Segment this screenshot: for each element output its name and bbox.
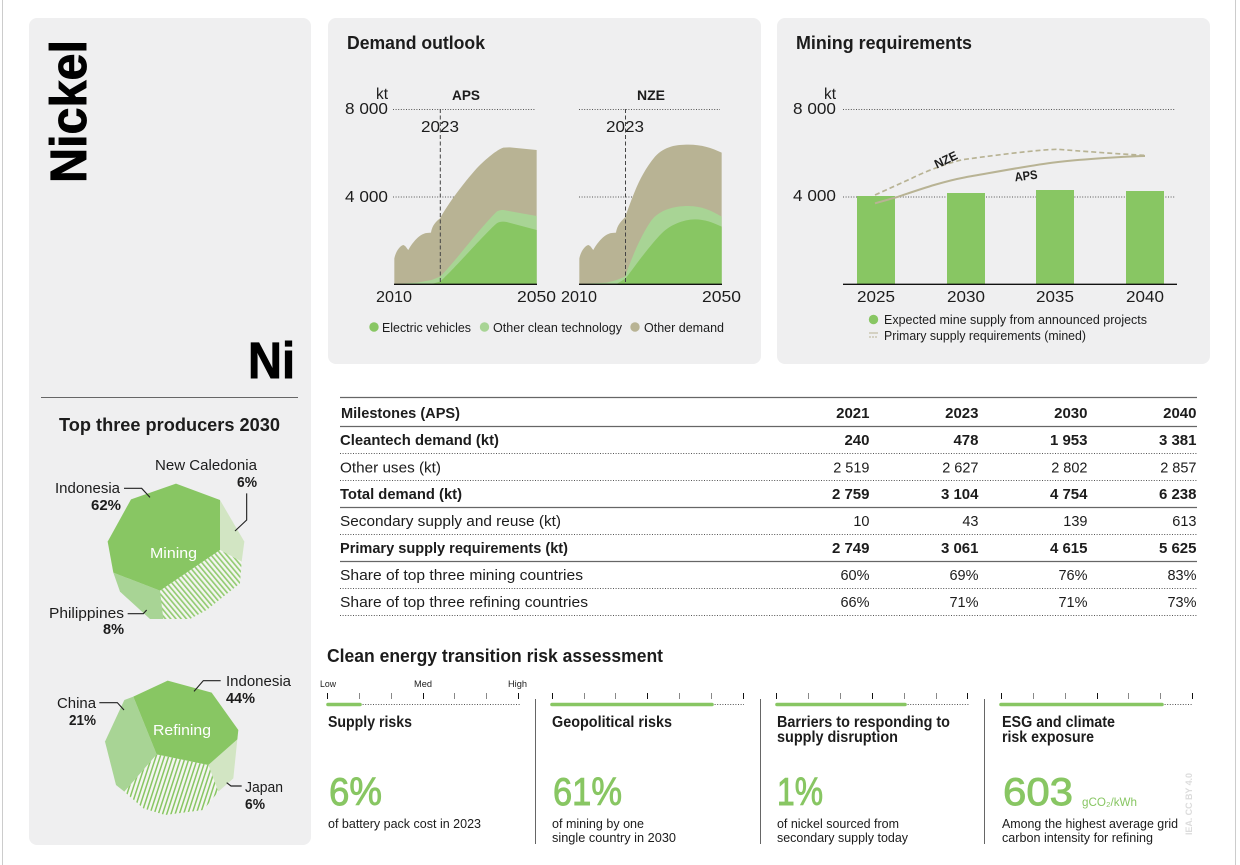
table row: mining share: 83%	[1167, 568, 1197, 584]
chart: NZE demand area: 2010	[561, 289, 597, 306]
table row: header: 2023	[945, 405, 978, 422]
table row: primary supply	[340, 540, 1196, 557]
chart: refining share polygon: 44%	[226, 690, 255, 707]
chart: mine supply bars and requirement lines: NZE	[932, 149, 960, 171]
panel: geopolitical risks: 61%	[553, 771, 622, 814]
panel: nickel overview and top producers	[29, 18, 311, 845]
table row: other uses: 2 519	[833, 460, 870, 476]
panel: barriers to responding to supply disruption: of nickel sourced from	[777, 817, 899, 831]
panel: barriers to responding to supply disruption: secondary supply today	[777, 831, 909, 845]
legend: demand categories	[369, 321, 724, 335]
panel: mining requirements	[777, 18, 1210, 364]
chart: NZE demand area	[561, 87, 741, 306]
chart: mining share polygon: Indonesia	[55, 480, 121, 497]
chart: APS demand area: 2050	[517, 289, 556, 306]
panel: ESG and climate risk exposure: Among the highest average grid	[1002, 817, 1178, 831]
panel: supply risks: 6%	[329, 771, 382, 814]
panel: ESG and climate risk exposure: 603	[1003, 771, 1073, 814]
chart: refining share polygon: Refining	[153, 722, 211, 739]
table row: mining share	[340, 568, 1197, 584]
panel: supply risks	[320, 679, 527, 831]
chart: mine supply bars and requirement lines: 4 000	[793, 188, 836, 205]
panel: demand outlook	[328, 18, 761, 364]
table row: mining share: 69%	[949, 568, 979, 584]
table row: header: Milestones (APS)	[341, 405, 460, 422]
table row: secondary supply	[340, 514, 1196, 530]
legend: mining requirements: Expected mine supply from announced projects	[884, 313, 1147, 327]
chart: mine supply bars and requirement lines: 2030	[947, 289, 985, 306]
heading: risk assessment: Clean energy transition risk assessment	[327, 646, 663, 666]
table row: primary supply: 3 061	[941, 540, 978, 557]
table row: other uses	[340, 460, 1196, 476]
legend: demand categories: Electric vehicles	[382, 321, 471, 335]
panel: geopolitical risks	[552, 693, 744, 845]
table row: cleantech demand: 240	[844, 432, 870, 449]
chart: refining share polygon: 6%	[245, 796, 265, 813]
table row: cleantech demand: 3 381	[1159, 432, 1196, 449]
table row: total demand: 4 754	[1050, 486, 1088, 503]
legend: demand categories: Other demand	[644, 321, 724, 335]
chart: APS demand area: 4 000	[345, 189, 388, 206]
panel: barriers to responding to supply disruption	[776, 693, 969, 845]
chart: NZE demand area: NZE	[637, 87, 665, 103]
chart: NZE demand area: 2050	[702, 289, 741, 306]
chart: mine supply bars and requirement lines: 2035	[1036, 289, 1074, 306]
panel: ESG and climate risk exposure: ESG and climate	[1002, 714, 1115, 731]
panel: supply risks: of battery pack cost in 2023	[328, 817, 481, 831]
table row: primary supply: Primary supply requirements (kt)	[340, 540, 568, 557]
table row: total demand: 6 238	[1159, 486, 1196, 503]
table row: primary supply: 2 749	[832, 540, 870, 557]
table row: secondary supply: 43	[962, 514, 978, 530]
table row: header: 2030	[1054, 405, 1088, 422]
panel: supply risks: Supply risks	[328, 714, 412, 731]
table row: secondary supply: 139	[1063, 514, 1088, 530]
panel: supply risks: Low	[320, 679, 336, 689]
chart: refining share polygon: China	[57, 695, 97, 712]
chart: refining share polygon: 21%	[69, 712, 96, 729]
table row: cleantech demand	[340, 432, 1196, 449]
panel: geopolitical risks: single country in 2030	[552, 831, 676, 845]
chart: APS demand area: 2010	[376, 289, 412, 306]
chart: mine supply bars and requirement lines: 2025	[857, 289, 895, 306]
chart: mining share polygon: New Caledonia	[155, 457, 258, 474]
table row: cleantech demand: 1 953	[1050, 432, 1088, 449]
table row: mining share: 60%	[840, 568, 870, 584]
panel: ESG and climate risk exposure: risk exposure	[1002, 729, 1094, 746]
table row: mining share: Share of top three mining countries	[340, 568, 583, 584]
panel: barriers to responding to supply disruption: Barriers to responding to	[777, 714, 950, 731]
table row: refining share: 66%	[840, 595, 870, 611]
table row: total demand: 3 104	[941, 486, 979, 503]
table row: total demand: 2 759	[832, 486, 870, 503]
table row: other uses: 2 627	[942, 460, 978, 476]
table row: primary supply: 4 615	[1050, 540, 1088, 557]
panel: geopolitical risks: of mining by one	[552, 817, 644, 831]
legend: mining requirements	[869, 313, 1147, 343]
table row: refining share: Share of top three refining countries	[340, 595, 588, 611]
panel: geopolitical risks: Geopolitical risks	[552, 714, 672, 731]
chart: APS demand area: 8 000	[345, 101, 388, 118]
table row: primary supply: 5 625	[1159, 540, 1196, 557]
table row: secondary supply: Secondary supply and reuse (kt)	[340, 514, 561, 530]
table: milestones APS	[340, 398, 1197, 616]
chart: APS demand area: kt	[376, 86, 389, 103]
chart: mine supply bars and requirement lines: kt	[824, 86, 837, 103]
table row: header	[341, 405, 1196, 422]
table row: header: 2021	[836, 405, 870, 422]
chart: refining share polygon	[57, 673, 292, 815]
chart: mining share polygon: Philippines	[49, 605, 124, 622]
chart: APS demand area: 2023	[421, 119, 459, 136]
table row: total demand	[340, 486, 1196, 503]
chart: mining share polygon: 62%	[91, 497, 121, 514]
table row: refining share	[340, 595, 1197, 611]
table row: refining share: 71%	[1058, 595, 1088, 611]
table row: cleantech demand: 478	[953, 432, 978, 449]
heading: demand outlook: Demand outlook	[347, 33, 486, 53]
heading: mining requirements: Mining requirements	[796, 33, 972, 53]
chemical symbol: Ni: Ni	[248, 332, 295, 389]
heading: top three producers 2030: Top three producers 2030	[59, 415, 280, 435]
table row: refining share: 73%	[1167, 595, 1197, 611]
chart: refining share polygon: Japan	[245, 779, 283, 796]
chart: mining share polygon: 8%	[103, 621, 124, 638]
chart: mining share polygon: 6%	[237, 474, 257, 491]
panel: supply risks: High	[508, 679, 527, 689]
panel: ESG and climate risk exposure	[1001, 693, 1193, 845]
chart: mine supply bars and requirement lines: APS	[1014, 168, 1038, 184]
table row: other uses: Other uses (kt)	[340, 460, 441, 476]
chart: NZE demand area: 2023	[606, 119, 644, 136]
table row: secondary supply: 613	[1172, 514, 1196, 530]
table row: secondary supply: 10	[853, 514, 870, 530]
chart: mining share polygon	[49, 457, 258, 638]
chart: mine supply bars and requirement lines: 8 000	[793, 101, 836, 118]
chart: refining share polygon: Indonesia	[226, 673, 292, 690]
panel: ESG and climate risk exposure: carbon intensity for refining	[1002, 831, 1153, 845]
table row: other uses: 2 857	[1160, 460, 1196, 476]
panel: ESG and climate risk exposure: gCO₂/kWh	[1082, 795, 1137, 809]
legend: mining requirements: Primary supply requirements (mined)	[884, 329, 1086, 343]
chart: mine supply bars and requirement lines: 2040	[1126, 289, 1164, 306]
credit: IEA CC BY 4.0: IEA. CC BY 4.0	[1184, 773, 1194, 835]
panel: barriers to responding to supply disruption: supply disruption	[777, 729, 898, 746]
legend: demand categories: Other clean technology	[493, 321, 623, 335]
table row: other uses: 2 802	[1051, 460, 1088, 476]
table row: total demand: Total demand (kt)	[340, 486, 462, 503]
table row: header: 2040	[1163, 405, 1196, 422]
chart: mine supply bars and requirement lines	[793, 86, 1177, 306]
panel: supply risks: Med	[414, 679, 432, 689]
title: Nickel: Nickel	[40, 40, 97, 183]
panel: barriers to responding to supply disruption: 1%	[777, 771, 823, 814]
table row: mining share: 76%	[1058, 568, 1088, 584]
chart: mining share polygon: Mining	[150, 545, 197, 562]
chart: APS demand area	[345, 86, 556, 306]
table row: cleantech demand: Cleantech demand (kt)	[340, 432, 499, 449]
table row: refining share: 71%	[949, 595, 979, 611]
chart: APS demand area: APS	[452, 87, 480, 103]
